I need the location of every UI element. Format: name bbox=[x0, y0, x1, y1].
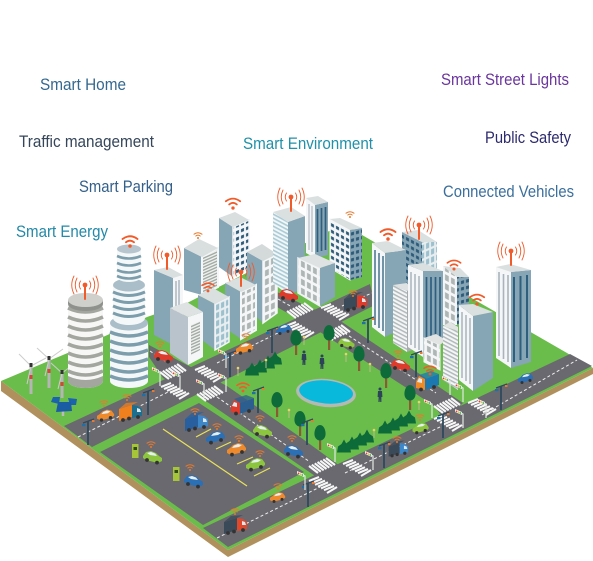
building: tall behind left bbox=[219, 199, 249, 277]
building: tall dark stripes bbox=[372, 229, 406, 337]
wifi: front right bbox=[470, 295, 484, 306]
round tower: blue tiers bbox=[110, 236, 148, 388]
building: short grey windows bbox=[298, 254, 335, 306]
crosswalks bbox=[160, 303, 496, 493]
hedge: left bbox=[245, 352, 282, 376]
building: windows behind with antenna bbox=[402, 216, 437, 300]
wifi: blue tower bbox=[122, 236, 138, 248]
building: slim tower bbox=[306, 196, 328, 258]
road: lower left to upper right bbox=[64, 284, 375, 447]
parking lot bbox=[100, 403, 304, 525]
cars: red bbox=[154, 289, 410, 372]
label: Traffic management: Traffic management bbox=[19, 133, 154, 151]
wind turbines bbox=[19, 348, 70, 398]
trees bbox=[271, 325, 416, 450]
label: Public Safety: Public Safety bbox=[485, 129, 572, 147]
building: low window block bbox=[424, 334, 446, 370]
building: antenna middle bbox=[225, 263, 256, 339]
road: left diagonal bbox=[149, 345, 340, 478]
road: right diagonal bbox=[277, 292, 463, 420]
wifi: middle building bbox=[194, 233, 202, 239]
bollard lights bbox=[237, 336, 420, 438]
trucks bbox=[119, 292, 439, 535]
label: Smart Street Lights: Smart Street Lights bbox=[441, 71, 569, 89]
label: Smart Home: Smart Home bbox=[40, 76, 126, 94]
antenna: far right bbox=[498, 242, 524, 265]
building: front grey box bbox=[170, 302, 203, 365]
building: windows rear bbox=[330, 212, 362, 280]
wifi: small windows bbox=[202, 283, 214, 292]
wifi: tall building bbox=[226, 199, 240, 210]
board: brown base bbox=[1, 368, 593, 557]
crosswalks: top junction bbox=[286, 303, 350, 340]
street lamps bbox=[82, 317, 508, 507]
building: right windows bbox=[443, 260, 469, 325]
dashes: road two bbox=[217, 360, 577, 538]
label: Smart Parking: Smart Parking bbox=[79, 178, 173, 196]
building: windows grid tall bbox=[247, 244, 277, 323]
roads network bbox=[64, 284, 592, 547]
dashes: road four bbox=[278, 299, 436, 393]
crosswalks: bottom junction bbox=[309, 458, 371, 493]
board: green lawn bbox=[1, 224, 593, 550]
building: large centre right bbox=[408, 263, 443, 357]
label: Smart Environment: Smart Environment bbox=[243, 135, 373, 153]
crosswalks: left junction bbox=[160, 364, 223, 401]
cars: green bbox=[143, 338, 429, 472]
road: bottom front bbox=[203, 354, 592, 547]
short yellow bays bbox=[196, 429, 270, 476]
round tower: grey bbox=[68, 276, 103, 388]
antenna: rear right bbox=[406, 216, 432, 239]
building: narrow white bands bbox=[393, 283, 412, 352]
solar panels bbox=[51, 397, 77, 416]
building: left tall with antenna bbox=[154, 246, 183, 345]
building: banded bbox=[443, 322, 458, 390]
building: left middle with grey bands bbox=[184, 233, 218, 295]
crosswalks: right junction bbox=[434, 398, 496, 431]
label: Connected Vehicles: Connected Vehicles bbox=[443, 183, 574, 201]
road centre lines bbox=[78, 293, 577, 538]
antenna: grey tower bbox=[72, 276, 98, 299]
people in park bbox=[302, 350, 382, 402]
cars: blue bbox=[184, 324, 533, 488]
wifi: tall dark stripes bbox=[380, 229, 396, 241]
wifi: right windows bbox=[447, 260, 461, 271]
trees and hedges bbox=[245, 325, 416, 452]
label: Smart Energy: Smart Energy bbox=[16, 223, 109, 241]
parking markings bbox=[163, 429, 270, 486]
dashes: road three bbox=[150, 351, 310, 462]
hedge: bottom bbox=[337, 430, 374, 452]
wifi: rear windows bbox=[346, 212, 354, 218]
charging stations bbox=[132, 444, 180, 481]
vehicles bbox=[97, 289, 533, 535]
antenna: left tall bbox=[154, 246, 180, 269]
hedge: right bbox=[378, 410, 416, 434]
building: front right bbox=[459, 295, 493, 391]
long yellow line bbox=[163, 429, 247, 486]
antenna: striped building bbox=[278, 188, 304, 211]
building: far right tower bbox=[496, 242, 531, 368]
antenna: middle bbox=[228, 263, 254, 286]
building: small windows bbox=[198, 283, 229, 350]
pond bbox=[295, 376, 357, 410]
wifi signals on vehicles bbox=[100, 291, 436, 515]
cars: orange bbox=[97, 343, 285, 503]
traffic lights bbox=[152, 349, 486, 490]
dashes: road one bbox=[78, 293, 372, 437]
building: striped white and blue bbox=[273, 188, 305, 295]
